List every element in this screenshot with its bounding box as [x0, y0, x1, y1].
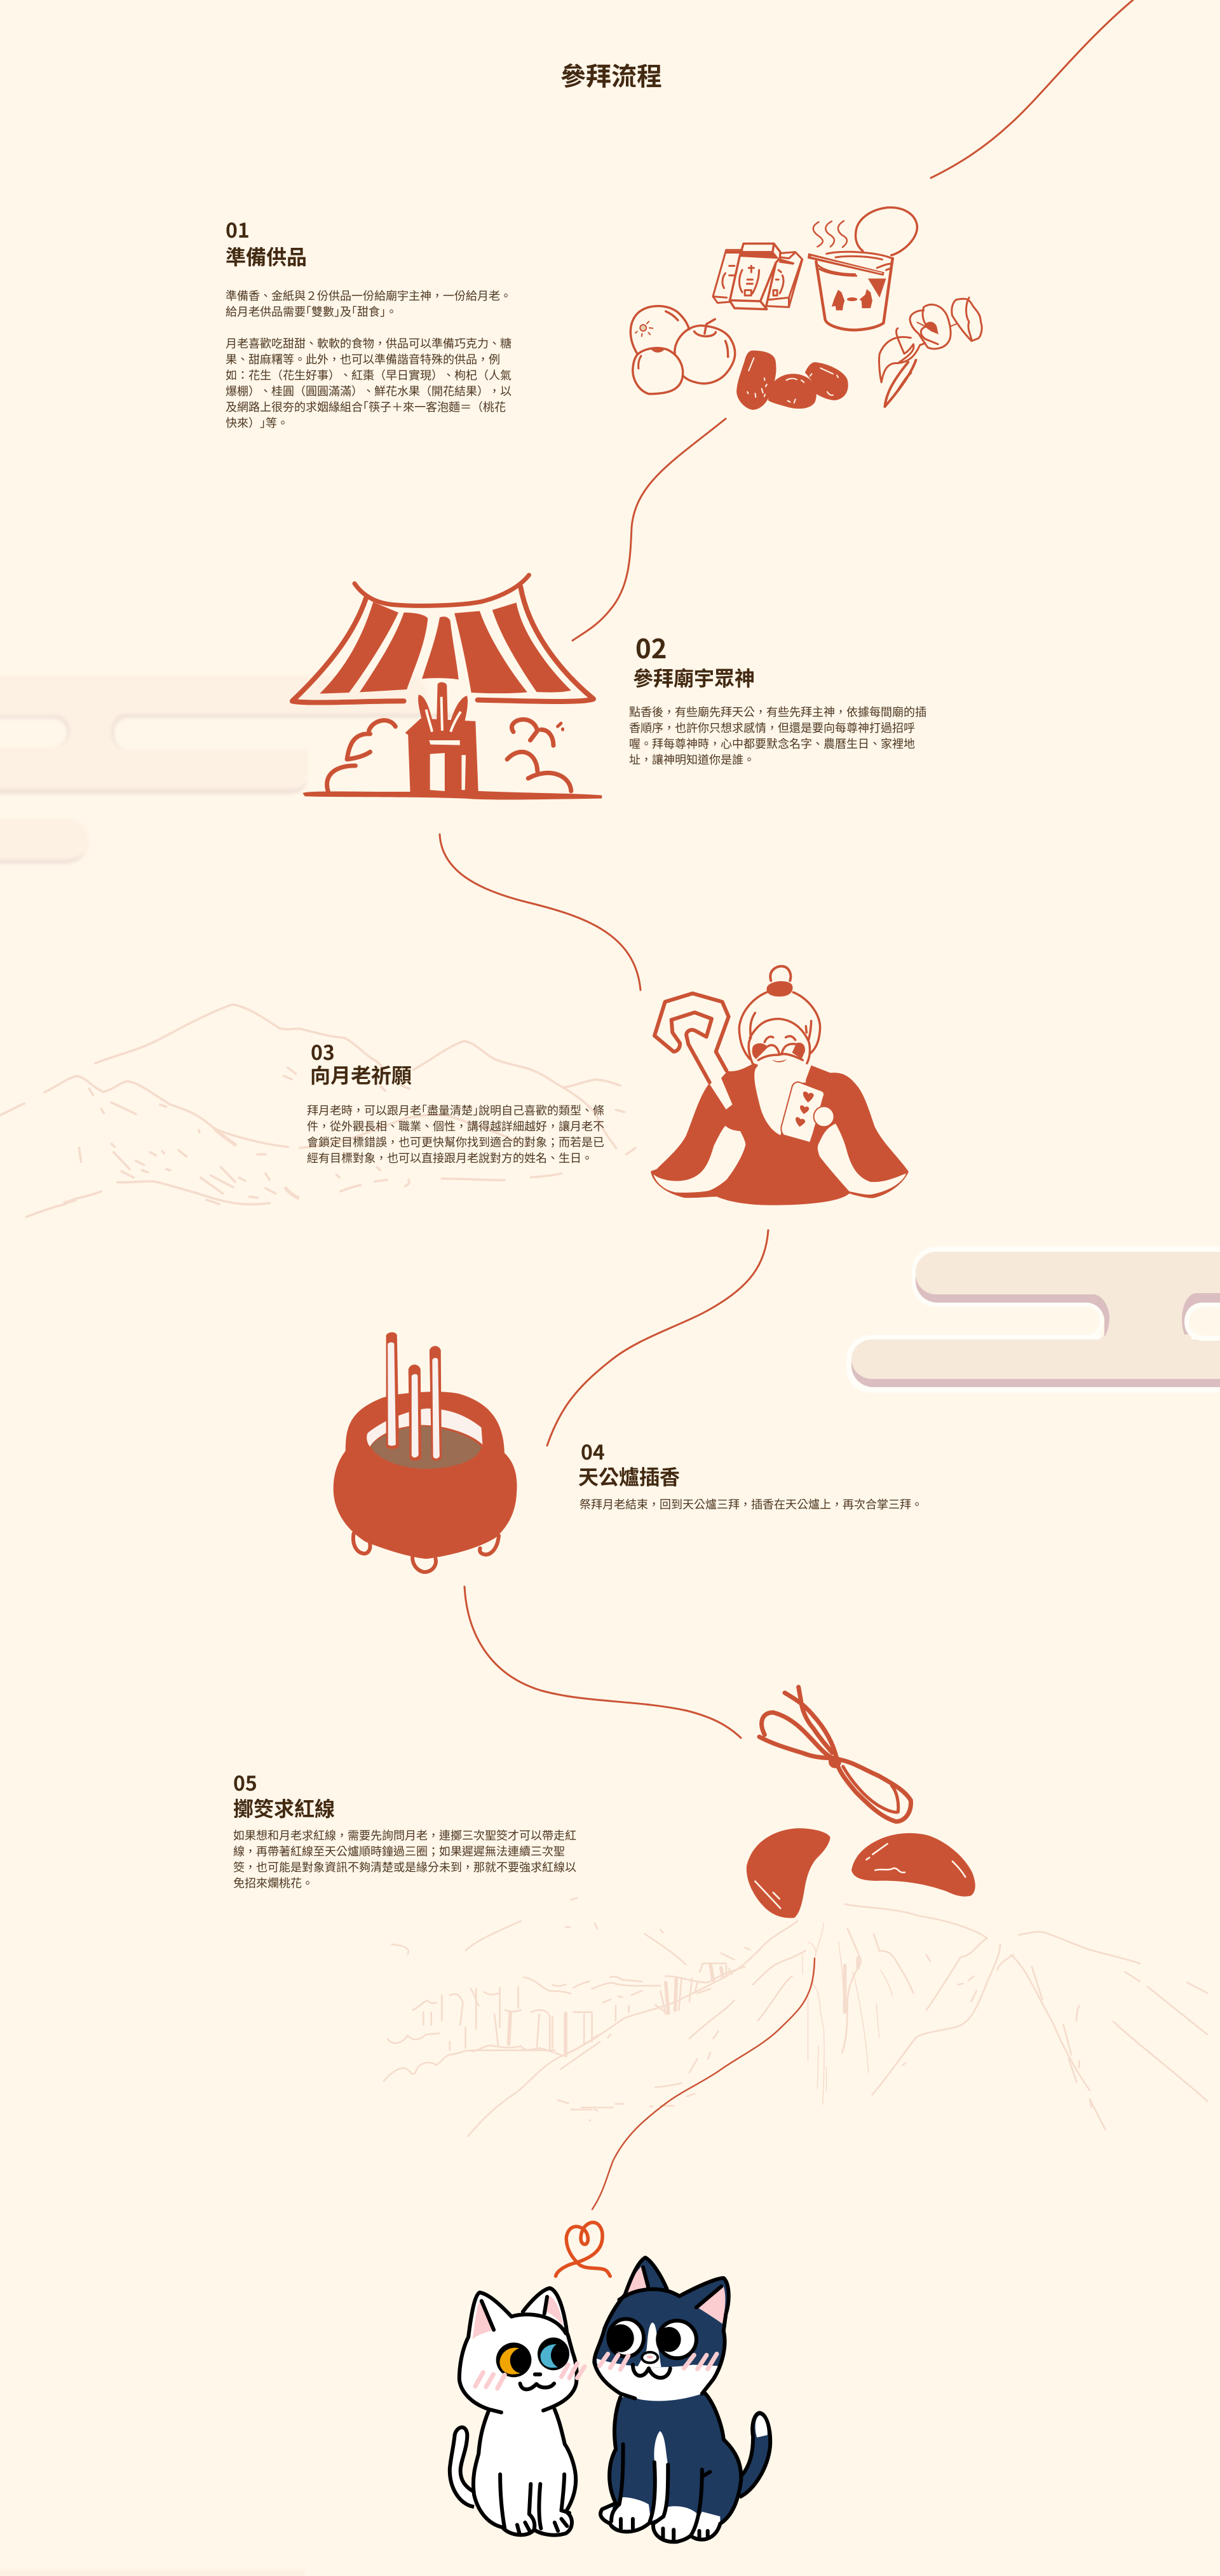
step 01 heading: 準備供品: [226, 241, 307, 271]
connector curve 4: [547, 1230, 768, 1446]
navy cat ears: [625, 2266, 725, 2324]
love card: [781, 1082, 834, 1142]
step 05 heading: 擲筊求紅線: [233, 1793, 335, 1822]
robe: [651, 1063, 909, 1205]
icon: temple ground: [302, 791, 602, 800]
step 01 number: 01: [226, 215, 250, 244]
step 05 body: [233, 1827, 576, 1891]
white cat body: [473, 2410, 576, 2535]
step 03 text: [307, 1037, 604, 1166]
step 02 body: [629, 703, 926, 768]
step 05 body: 如果想和月老求紅線，需要先詢問月老，連擲三次聖筊才可以帶走紅: [233, 1827, 576, 1843]
icon: gift boxes: [713, 243, 803, 309]
white cat blush: [475, 2364, 585, 2389]
connector curve 5: [464, 1587, 741, 1738]
connector curve 1: [931, 0, 1133, 178]
icon: red string: [759, 1687, 911, 1822]
step 02 text: [629, 628, 926, 768]
navy cat white muzzle: [597, 2322, 718, 2401]
step 01 body: 及網路上很夯的求姻緣組合「筷子＋來一客泡麵＝（桃花: [226, 398, 506, 415]
step 01 body: 果、甜麻糬等。此外，也可以準備諧音特殊的供品，例: [226, 351, 500, 367]
burner ash: [370, 1426, 482, 1469]
navy cat nose and mouth: [633, 2352, 670, 2378]
step 05 body: 筊，也可能是對象資訊不夠清楚或是緣分未到，那就不要強求紅線以: [233, 1859, 576, 1875]
step 03 body: 會鎖定目標錯誤，也可更快幫你找到適合的對象；而若是已: [307, 1134, 604, 1150]
icon: red dates: [736, 351, 848, 410]
step 01 body: 給月老供品需要「雙數」及「甜食」。: [226, 303, 397, 320]
icon: incense holder: [405, 682, 478, 796]
beard: [754, 1061, 806, 1135]
step 04 text: [578, 1437, 923, 1512]
illustration: red string and jiaobei: [747, 1687, 975, 1918]
icon: temple roof: [292, 575, 593, 703]
navy cat outline: [594, 2258, 729, 2399]
white cat ears: [473, 2296, 563, 2340]
step 03 body: 經有目標對象，也可以直接跟月老說對方的姓名、生日。: [307, 1149, 593, 1166]
illustration: incense burner: [334, 1332, 517, 1572]
mountains: behind step 3: [0, 1005, 635, 1217]
navy cat tail: [740, 2413, 770, 2497]
burner legs: [353, 1533, 499, 1572]
step 04 number: 04: [581, 1437, 605, 1466]
title: 參拜流程: [560, 56, 662, 93]
illustration: Yue Lao: [651, 966, 909, 1205]
faint cloud: left: [0, 675, 470, 2576]
step 01 body: [226, 287, 512, 431]
connector curve 6: [592, 1958, 815, 2209]
staff: [654, 993, 733, 1109]
step 01 body: 如：花生（花生好事）、紅棗（早日實現）、枸杞（人氣: [226, 367, 512, 383]
illustration: heart string: [556, 2223, 610, 2276]
burner inner rim: [367, 1409, 482, 1447]
step 03 heading: 向月老祈願: [310, 1060, 412, 1089]
icon: oranges and apple: [630, 306, 735, 394]
step 04 body: 祭拜月老結束，回到天公爐三拜，插香在天公爐上，再次合掌三拜。: [580, 1496, 923, 1512]
white cat tail: [450, 2427, 474, 2507]
navy cat blush: [599, 2354, 717, 2369]
step 01 body: 月老喜歡吃甜甜、軟軟的食物，供品可以準備巧克力、糖: [226, 335, 512, 351]
icon: flowers: [879, 297, 982, 407]
icon: temple clouds: [327, 719, 571, 791]
illustration: white cat: [450, 2288, 585, 2535]
icon: left jiaobei: [747, 1828, 830, 1918]
step 03 number: 03: [311, 1037, 335, 1066]
connector curve 3: [440, 834, 640, 990]
icon: right jiaobei: [851, 1833, 975, 1897]
step 03 body: [307, 1102, 604, 1166]
left sleeve opening: [653, 1126, 745, 1193]
white cat body outline: [473, 2410, 576, 2535]
white cat head: [459, 2288, 577, 2413]
white cat mouth: [520, 2373, 554, 2389]
step 04 heading: 天公爐插香: [578, 1461, 680, 1491]
right sleeve opening: [818, 1123, 906, 1195]
illustration: temple: [292, 575, 602, 800]
step 02 number: 02: [635, 628, 667, 667]
navy cat head: [594, 2258, 729, 2401]
navy cat eyes: [607, 2319, 696, 2358]
step 05 body: 線，再帶著紅線至天公爐順時鐘過三圈；如果遲遲無法連續三次聖: [233, 1843, 565, 1859]
icon: instant noodle cup: [808, 208, 917, 330]
illustration: offerings: [630, 208, 982, 410]
step 01 body: 爆棚）、桂圓（圓圓滿滿）、鮮花水果（開花結果），以: [226, 383, 512, 399]
cloud: right: [826, 1247, 1220, 1393]
illustration: navy cat: [594, 2258, 770, 2542]
incense sticks: [386, 1332, 442, 1461]
connector curve 2: [573, 419, 726, 641]
navy cat body outline: [600, 2394, 741, 2542]
mountains: behind step 5: [384, 1898, 1207, 2136]
step 05 number: 05: [233, 1768, 257, 1797]
burner body: [334, 1392, 517, 1559]
head: [739, 966, 820, 1064]
step 01 body: 準備香、金紙與２份供品一份給廟宇主神，一份給月老。: [226, 287, 512, 304]
white cat outline: [459, 2288, 577, 2413]
step 05 text: [233, 1768, 576, 1891]
step 02 body: 址，讓神明知道你是誰。: [629, 751, 755, 768]
step 02 body: 點香後，有些廟先拜天公，有些先拜主神，依據每間廟的插: [629, 703, 926, 720]
step 03 body: 拜月老時，可以跟月老「盡量清楚」說明自己喜歡的類型、條: [307, 1102, 604, 1118]
navy cat body: [600, 2394, 741, 2542]
step 02 body: 喔。拜每尊神時，心中都要默念名字、農曆生日、家裡地: [629, 735, 915, 752]
step 05 body: 免招來爛桃花。: [233, 1874, 313, 1891]
step 01 text: [226, 215, 512, 431]
white cat eyes: [496, 2338, 569, 2377]
step 03 body: 件，從外觀長相、職業、個性，講得越詳細越好，讓月老不: [307, 1118, 604, 1134]
step 02 body: 香順序，也許你只想求感情，但還是要向每尊神打過招呼: [629, 719, 915, 736]
navy cat white paws and chest: [600, 2431, 720, 2540]
step 01 body: 快來）」等。: [226, 414, 288, 431]
step 02 heading: 參拜廟宇眾神: [633, 663, 755, 692]
